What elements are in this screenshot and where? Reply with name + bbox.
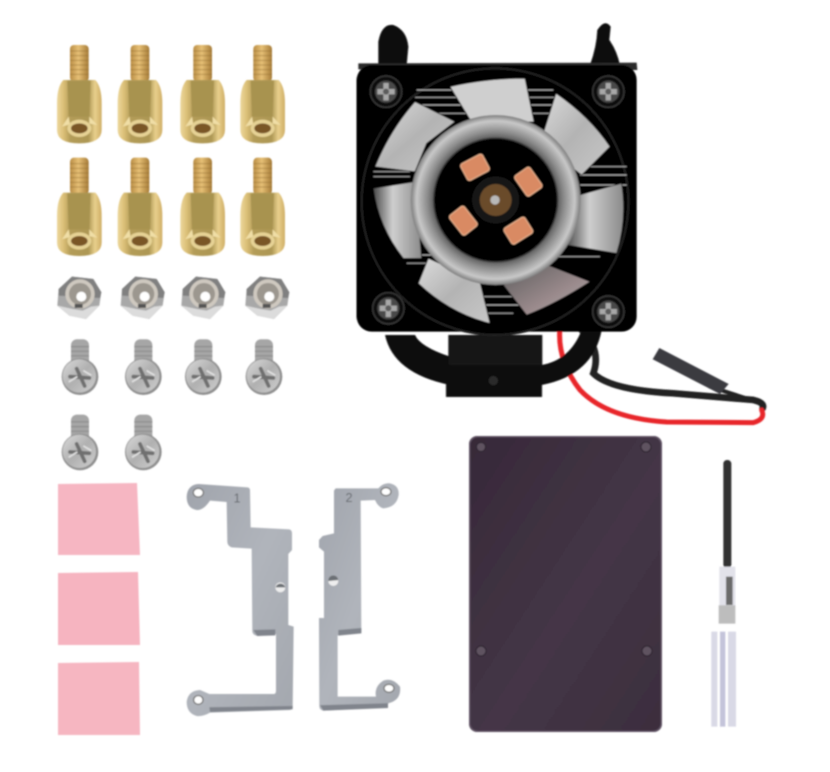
pad 3 (58, 662, 140, 735)
translucent dark acrylic plate (469, 436, 662, 732)
hub centre (472, 177, 519, 223)
lower heatsink ring (385, 335, 450, 385)
fan housing (357, 65, 637, 332)
clip pin left (378, 25, 408, 65)
heatsink fins (373, 90, 627, 313)
standoff row 2 (57, 158, 285, 256)
screws row 2 (62, 415, 162, 470)
top bar (358, 63, 637, 70)
screws row 1 (62, 339, 282, 395)
copper coils (448, 153, 543, 245)
brass standoffs (57, 45, 289, 470)
housing screws (370, 76, 624, 327)
screwdriver handle (711, 632, 736, 727)
pad 1 (58, 483, 140, 555)
hex nuts (57, 277, 289, 319)
screwdriver collar (719, 567, 735, 624)
fan connector (653, 348, 729, 394)
clip pin right (590, 23, 620, 65)
fan assembly (357, 23, 763, 423)
bracket 2 (319, 483, 400, 711)
wires (560, 327, 763, 423)
screwdriver shaft (723, 460, 731, 568)
heatsink block (446, 335, 542, 397)
fan blades (373, 78, 624, 323)
mounting brackets (187, 483, 400, 716)
plate mounting holes (476, 442, 652, 656)
bracket 1 (187, 484, 294, 716)
thermal pads (58, 483, 140, 735)
standoff row 1 (57, 45, 285, 143)
bracket 2: 2 (345, 491, 353, 505)
pad 2 (58, 572, 140, 645)
housing opening (362, 68, 628, 335)
bracket 1: 1 (233, 492, 241, 506)
screwdriver (711, 460, 736, 727)
fan hub (411, 115, 581, 285)
